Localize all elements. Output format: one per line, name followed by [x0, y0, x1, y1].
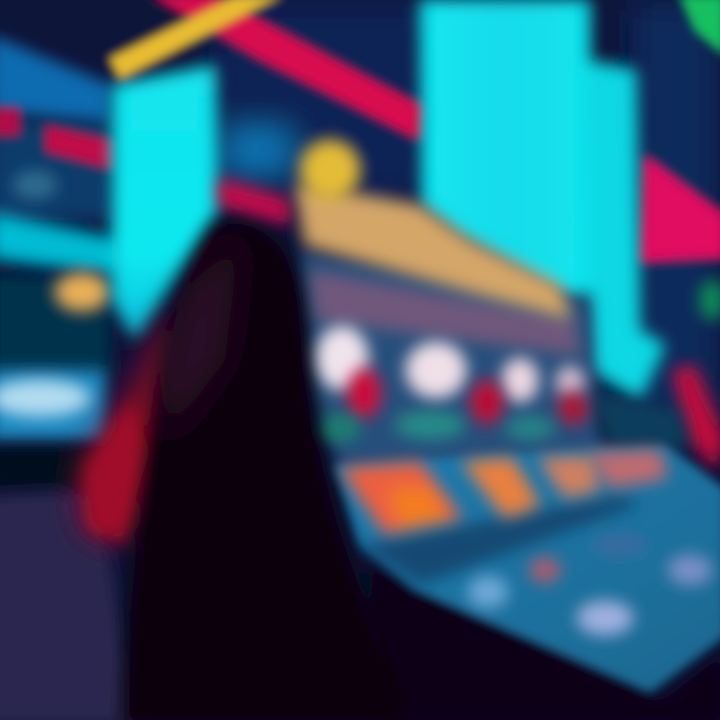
hair and body	[122, 221, 405, 720]
dark floor and base	[370, 560, 720, 720]
woman silhouette	[78, 221, 405, 720]
machine marquee	[218, 140, 572, 320]
right green spot	[700, 280, 720, 320]
right red accent	[672, 365, 720, 470]
large cyan columns	[420, 0, 665, 400]
magenta diagonal beam	[150, 0, 420, 140]
console orange buttons	[340, 450, 668, 534]
control console	[335, 445, 720, 692]
hair highlight	[160, 235, 240, 440]
reels and lights	[316, 326, 588, 442]
arcade machine body	[300, 250, 690, 470]
background wall tones	[210, 0, 720, 420]
left wall neon panels	[0, 35, 120, 490]
floor left	[0, 490, 135, 720]
red hair edge	[78, 320, 195, 545]
yellow diagonal beam	[108, 0, 285, 80]
magenta triangle	[642, 155, 720, 262]
green corner glow	[680, 0, 720, 55]
left cyan column	[112, 65, 218, 340]
